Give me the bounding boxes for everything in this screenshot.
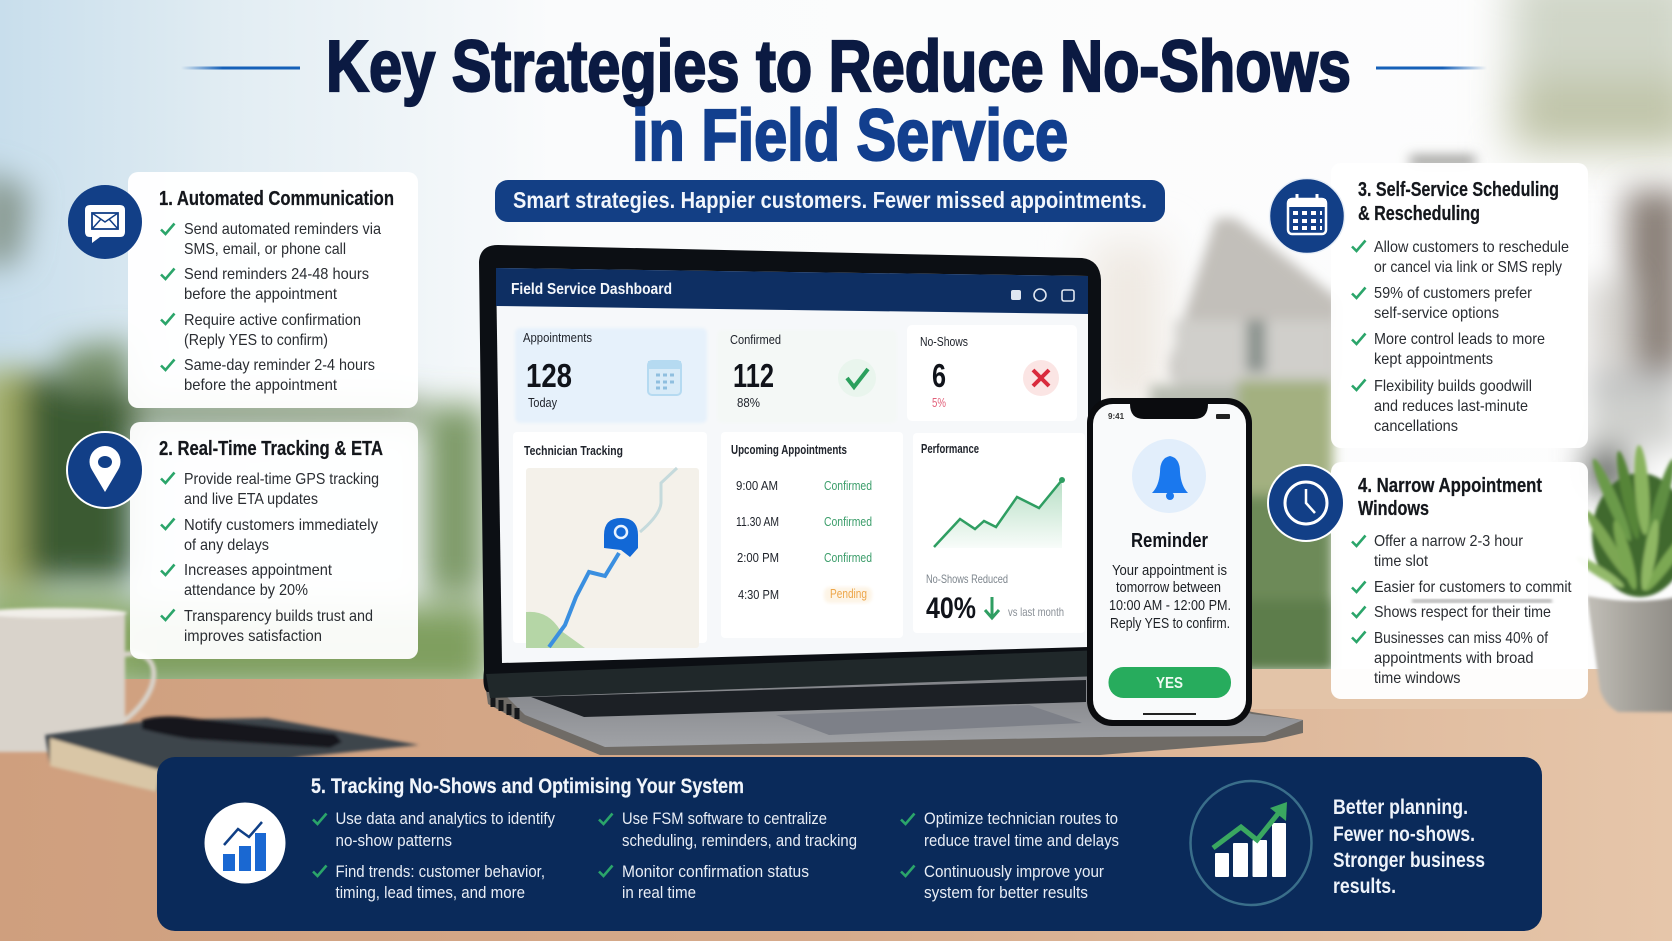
subtitle pill xyxy=(495,180,1165,222)
checklist: improves satisfaction xyxy=(184,628,322,645)
column 3 checklist: reduce travel time and delays xyxy=(924,832,1119,850)
column 2 checklist: scheduling, reminders, and tracking xyxy=(622,832,857,850)
KPI card: no-shows: 6 xyxy=(932,357,946,394)
icon: clock xyxy=(1268,465,1344,541)
panel: technician tracking map xyxy=(513,432,707,648)
checklist: or cancel via link or SMS reply xyxy=(1374,259,1562,276)
panel: 1. automated communication xyxy=(68,172,418,408)
checklist: Offer a narrow 2-3 hour xyxy=(1374,533,1524,550)
closing statement: Stronger business xyxy=(1333,849,1485,872)
laptop xyxy=(479,245,1303,755)
checklist xyxy=(161,221,381,394)
potted plant xyxy=(1574,445,1672,712)
column 3 checklist: system for better results xyxy=(924,884,1088,902)
KPI card: confirmed: 112 xyxy=(733,357,774,394)
panel: 5. tracking no-shows and optimising xyxy=(157,757,1542,931)
checklist: 59% of customers prefer xyxy=(1374,285,1533,302)
title: Key Strategies to Reduce No-Shows xyxy=(326,27,1351,107)
icon: location pin xyxy=(67,432,143,508)
KPI card: appointments xyxy=(515,328,707,423)
icon: analytics chart xyxy=(204,802,286,884)
dashboard screen xyxy=(496,268,1088,663)
KPI card: confirmed: Confirmed xyxy=(730,333,781,347)
KPI card: no-shows: No-Shows xyxy=(920,335,968,349)
title: in Field Service xyxy=(632,96,1068,176)
panel: upcoming appointments: Upcoming Appointments xyxy=(731,443,847,457)
panel: upcoming appointments: Confirmed xyxy=(824,479,872,493)
KPI card: appointments: Today xyxy=(528,396,558,410)
YES button: YES xyxy=(1156,675,1183,692)
KPI card: appointments: 128 xyxy=(526,357,572,394)
column 2 checklist: Use FSM software to centralize xyxy=(622,810,827,828)
reminder message: Your appointment is xyxy=(1112,563,1227,579)
phone with reminder: Reminder xyxy=(1131,530,1208,552)
checklist: and reduces last-minute xyxy=(1374,398,1528,415)
panel: technician tracking map: Technician Tracking xyxy=(524,444,623,458)
icon: growth chart in ring xyxy=(1190,781,1312,905)
checklist: kept appointments xyxy=(1374,351,1493,368)
icon: calendar xyxy=(1270,178,1344,254)
panel: 4. narrow appointment windows: 4. Narrow Appointment xyxy=(1358,475,1542,497)
panel: upcoming appointments: Pending xyxy=(830,587,867,601)
laptop bezel xyxy=(479,245,1101,692)
panel: 3. self-service scheduling xyxy=(1270,163,1588,448)
column 3 checklist xyxy=(901,810,1119,902)
column 3 checklist: Continuously improve your xyxy=(924,863,1104,881)
panel: 5. tracking no-shows and optimising: 5. Tracking No-Shows and Optimising Your System xyxy=(311,775,744,798)
checklist: Same-day reminder 2-4 hours xyxy=(184,357,375,374)
panel: 1. automated communication: 1. Automated Communication xyxy=(159,188,394,210)
column 3 checklist: Optimize technician routes to xyxy=(924,810,1118,828)
notebook and pen xyxy=(45,716,419,792)
checklist: Send reminders 24-48 hours xyxy=(184,266,369,283)
panel: upcoming appointments: Confirmed xyxy=(824,515,872,529)
column 2 checklist: in real time xyxy=(622,884,696,902)
KPI card: appointments: Appointments xyxy=(523,331,592,345)
checklist xyxy=(161,471,379,645)
reminder message xyxy=(1109,563,1231,632)
checklist: SMS, email, or phone call xyxy=(184,241,346,258)
checklist: Businesses can miss 40% of xyxy=(1374,630,1548,647)
column 2 checklist: Monitor confirmation status xyxy=(622,863,809,881)
panel: upcoming appointments: 4:30 PM xyxy=(738,588,779,602)
column 1 checklist: Use data and analytics to identify xyxy=(336,810,556,828)
checklist: Notify customers immediately xyxy=(184,517,378,534)
panel: performance chart xyxy=(913,433,1085,633)
KPI card: no-shows: 5% xyxy=(932,396,946,410)
reminder message: 10:00 AM - 12:00 PM. xyxy=(1109,598,1231,614)
checklist: and live ETA updates xyxy=(184,491,318,508)
phone with reminder xyxy=(1087,398,1252,726)
panel: 4. narrow appointment windows: Windows xyxy=(1358,498,1429,520)
closing statement: Fewer no-shows. xyxy=(1333,823,1475,846)
panel: upcoming appointments: 9:00 AM xyxy=(736,479,778,493)
icon: message envelope xyxy=(68,185,142,259)
column 1 checklist xyxy=(313,810,556,902)
checklist: Flexibility builds goodwill xyxy=(1374,378,1532,395)
icon: bell xyxy=(1132,439,1206,513)
checklist xyxy=(1352,239,1569,435)
panel: 2. real-time tracking and ETA: 2. Real-Time Tracking & ETA xyxy=(159,438,383,460)
closing statement xyxy=(1333,796,1485,898)
reminder message: tomorrow between xyxy=(1116,580,1221,596)
checklist: Require active confirmation xyxy=(184,312,361,329)
panel: upcoming appointments xyxy=(721,432,903,638)
panel: 4. narrow appointment windows xyxy=(1268,462,1588,699)
column 2 checklist xyxy=(599,810,857,902)
subtitle pill: Smart strategies. Happier customers. Fewer missed appointments. xyxy=(513,187,1147,213)
checklist: Increases appointment xyxy=(184,562,333,579)
checklist: of any delays xyxy=(184,537,269,554)
checklist: Shows respect for their time xyxy=(1374,604,1551,621)
column 1 checklist: timing, lead times, and more xyxy=(336,884,525,902)
checklist: Allow customers to reschedule xyxy=(1374,239,1569,256)
checklist: self-service options xyxy=(1374,305,1499,322)
checklist: (Reply YES to confirm) xyxy=(184,332,328,349)
laptop base with keyboard xyxy=(486,664,1303,755)
checklist: time windows xyxy=(1374,670,1460,687)
checklist xyxy=(1352,533,1572,687)
panel: performance chart: vs last month xyxy=(1008,605,1064,619)
dashboard header xyxy=(496,268,1088,314)
closing statement: Better planning. xyxy=(1333,796,1468,819)
panel: upcoming appointments: 11.30 AM xyxy=(736,515,779,529)
panel: performance chart: Performance xyxy=(921,442,979,456)
coffee mug xyxy=(0,608,154,752)
checklist: Easier for customers to commit xyxy=(1374,579,1572,596)
panel: 3. self-service scheduling: 3. Self-Service Scheduling xyxy=(1358,179,1559,201)
checklist: appointments with broad xyxy=(1374,650,1534,667)
checklist: attendance by 20% xyxy=(184,582,308,599)
KPI card: confirmed xyxy=(717,330,897,423)
checklist: before the appointment xyxy=(184,286,338,303)
closing statement: results. xyxy=(1333,875,1396,898)
checklist: time slot xyxy=(1374,553,1428,570)
panel: upcoming appointments: Confirmed xyxy=(824,551,872,565)
dashboard header: Field Service Dashboard xyxy=(511,281,672,298)
checklist: Provide real-time GPS tracking xyxy=(184,471,379,488)
phone with reminder: 9:41 xyxy=(1108,412,1125,421)
KPI card: no-shows xyxy=(907,325,1077,421)
title xyxy=(181,27,1487,176)
checklist: cancellations xyxy=(1374,418,1458,435)
checklist: Send automated reminders via xyxy=(184,221,381,238)
panel: 2. real-time tracking and ETA xyxy=(67,422,418,659)
column 1 checklist: no-show patterns xyxy=(336,832,452,850)
panel: upcoming appointments: 2:00 PM xyxy=(737,551,779,565)
panel: performance chart: No-Shows Reduced xyxy=(926,572,1008,586)
column 1 checklist: Find trends: customer behavior, xyxy=(336,863,545,881)
checklist: before the appointment xyxy=(184,377,338,394)
panel: performance chart: 40% xyxy=(926,592,976,625)
YES button xyxy=(1108,667,1231,698)
checklist: More control leads to more xyxy=(1374,331,1545,348)
checklist: Transparency builds trust and xyxy=(184,608,373,625)
KPI card: confirmed: 88% xyxy=(737,396,760,410)
panel: 3. self-service scheduling: & Rescheduling xyxy=(1358,203,1480,225)
reminder message: Reply YES to confirm. xyxy=(1110,616,1230,632)
